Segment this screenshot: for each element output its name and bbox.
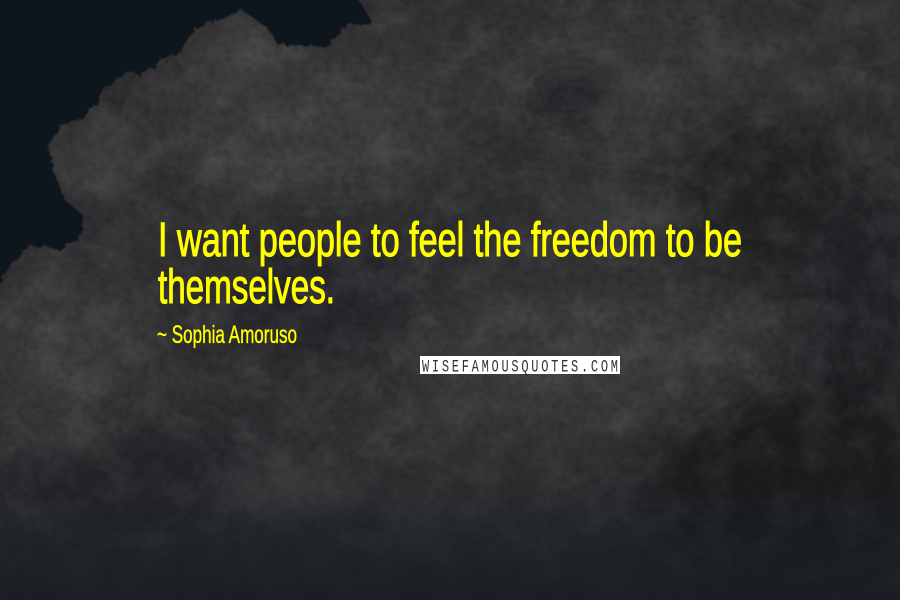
quote text: [158, 214, 742, 314]
author: ~ Sophia Amoruso: [157, 321, 297, 349]
quote text: themselves.: [158, 261, 335, 314]
watermark badge: WISEFAMOUSQUOTES.COM: [422, 359, 618, 377]
night sky: [0, 0, 372, 290]
